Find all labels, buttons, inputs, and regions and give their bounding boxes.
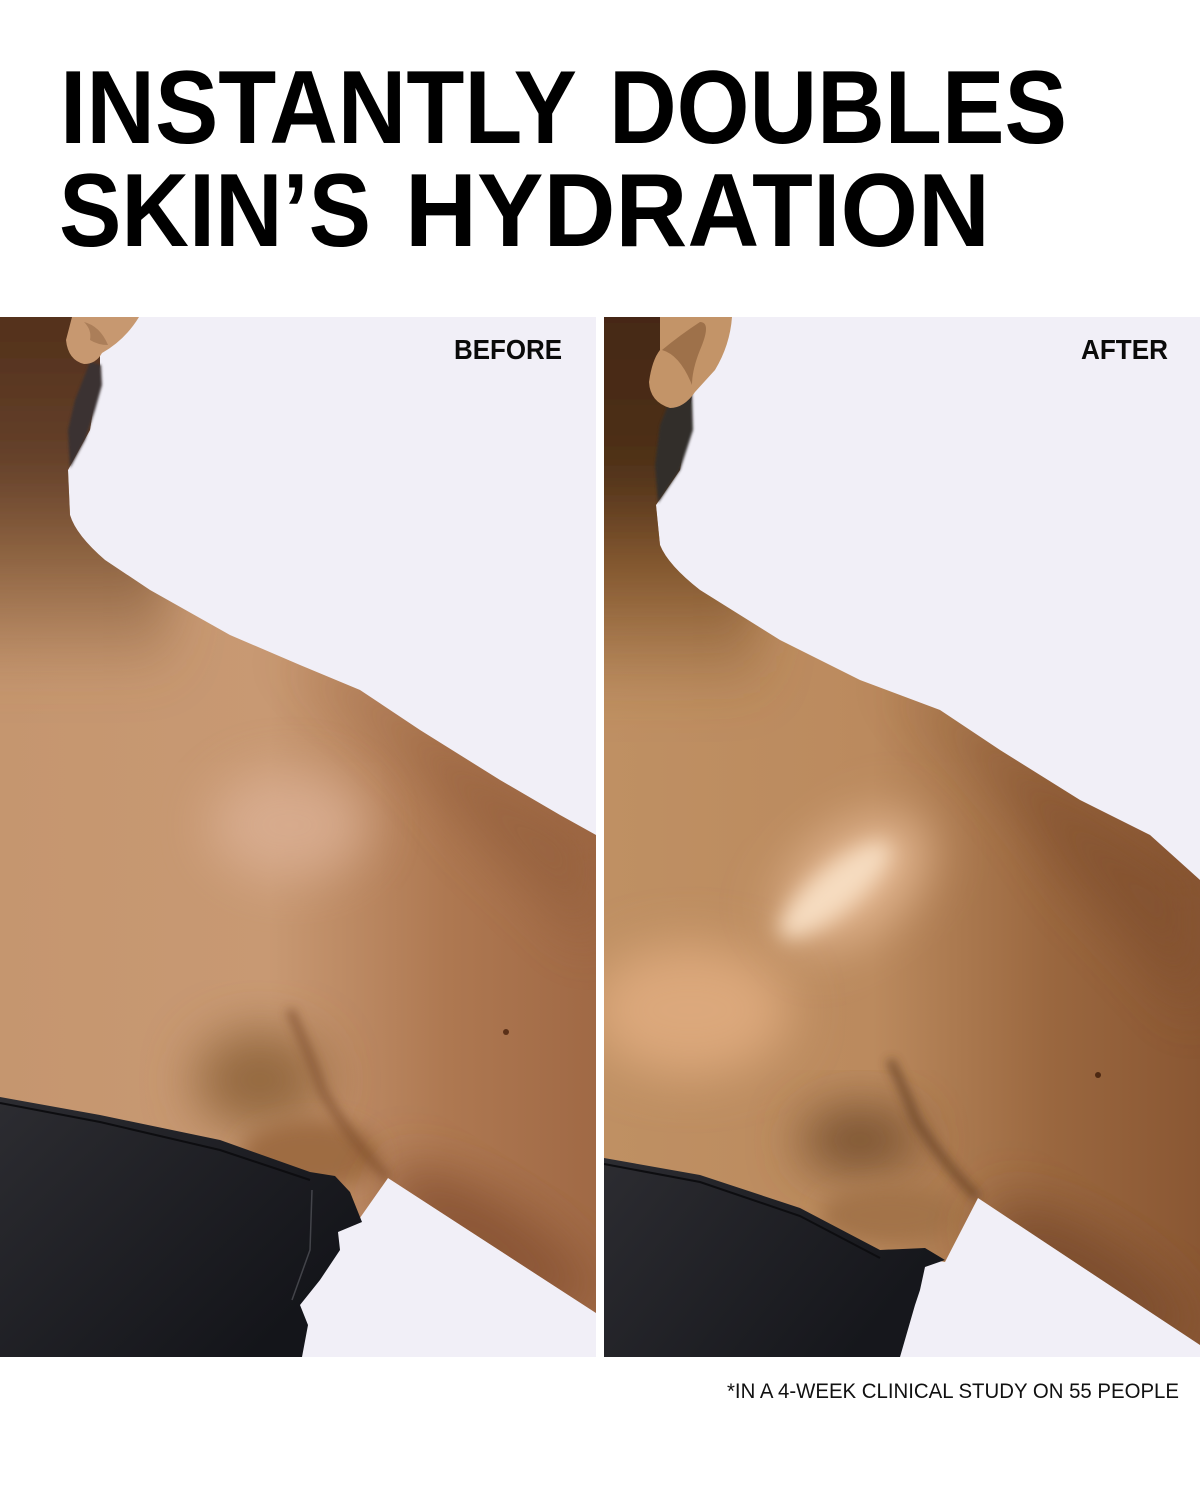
hair <box>655 392 693 503</box>
armpit crease <box>890 1060 978 1198</box>
title <box>59 50 1067 269</box>
ear <box>66 317 139 364</box>
skin <box>604 317 1200 1345</box>
black top <box>604 1158 945 1357</box>
ear <box>649 317 732 408</box>
title: DOUBLES <box>609 50 1067 166</box>
title: INSTANTLY <box>60 50 577 166</box>
label: before: BEFORE <box>454 334 562 365</box>
title: SKIN’S <box>59 153 371 269</box>
hair <box>68 362 102 468</box>
armpit crease <box>290 1010 388 1178</box>
label: after: AFTER <box>1081 334 1168 365</box>
black top <box>0 1097 362 1357</box>
title: HYDRATION <box>405 153 990 269</box>
panel: after photo <box>604 317 1200 1357</box>
panel: before photo <box>0 250 613 1357</box>
footnote: *IN A 4-WEEK CLINICAL STUDY ON 55 PEOPLE <box>727 1380 1179 1403</box>
skin <box>0 418 596 1313</box>
